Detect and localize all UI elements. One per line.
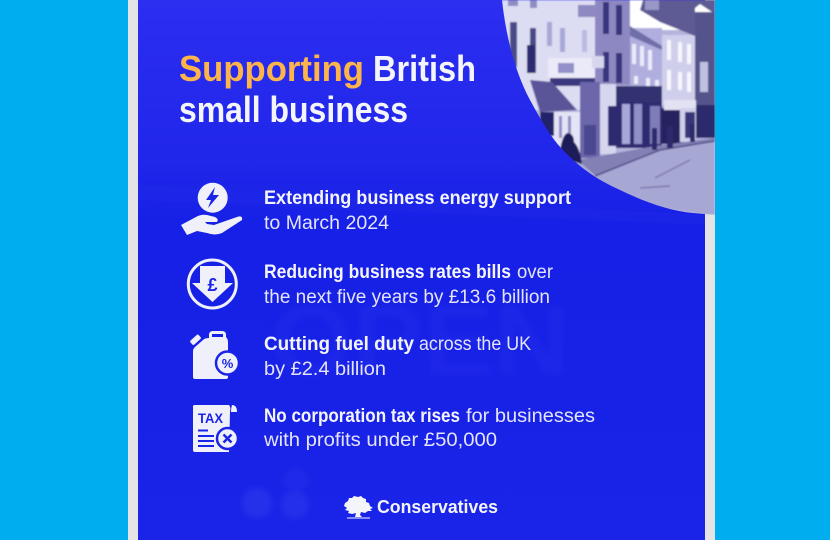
- text: business rates: the next five years by £13.6 billion: [264, 287, 550, 308]
- panel: blue poster: [138, 0, 705, 540]
- text: corporation tax: No corporation tax rises: [264, 406, 460, 427]
- text: fuel duty: Cutting fuel duty: [264, 334, 414, 355]
- icon: oak tree: [344, 496, 373, 518]
- text: fuel duty: across the UK: [419, 334, 531, 355]
- icon: pound down arrow: [188, 260, 236, 308]
- icon: pound down arrow: £: [207, 275, 218, 295]
- left white building: [500, 0, 596, 110]
- road and pavement: [578, 138, 715, 215]
- icon: fuel can: [190, 331, 239, 379]
- text: business rates: Reducing business rates bills: [264, 262, 511, 283]
- rooftops: [640, 0, 715, 36]
- pale building: [662, 35, 695, 105]
- text: energy support: [264, 188, 572, 234]
- text: corporation tax: [263, 406, 595, 451]
- heading: [179, 48, 476, 130]
- text: energy support: to March 2024: [264, 213, 389, 234]
- icon: hand holding energy: [181, 183, 242, 235]
- text: corporation tax: for businesses: [466, 406, 595, 427]
- icon: tax document: TAX: [198, 410, 224, 426]
- awning: [530, 80, 577, 112]
- background: grey card edge: [128, 0, 715, 540]
- right dark building: [694, 11, 715, 106]
- next building: [633, 27, 663, 32]
- photo: high street: [500, 0, 715, 215]
- text: fuel duty: [264, 334, 531, 380]
- icon: fuel can: %: [222, 356, 234, 371]
- pedestrians: [560, 133, 582, 164]
- text: energy support: Extending business energy support: [264, 188, 572, 209]
- heading: small business: [179, 89, 408, 130]
- text: corporation tax: with profits under £50,000: [263, 430, 497, 451]
- logo: Conservatives: Conservatives: [377, 496, 498, 517]
- mid brick building: [595, 0, 630, 85]
- icon: tax document: [193, 405, 238, 452]
- shop sign: [548, 58, 598, 78]
- text: business rates: [264, 262, 554, 308]
- shopfronts: [580, 82, 600, 158]
- sky: [625, 0, 715, 30]
- heading: British: [373, 48, 476, 89]
- panel: blue poster: OPEN: [270, 285, 570, 397]
- heading: Supporting: [179, 48, 364, 89]
- text: business rates: over: [517, 262, 554, 283]
- text: fuel duty: by £2.4 billion: [264, 359, 386, 380]
